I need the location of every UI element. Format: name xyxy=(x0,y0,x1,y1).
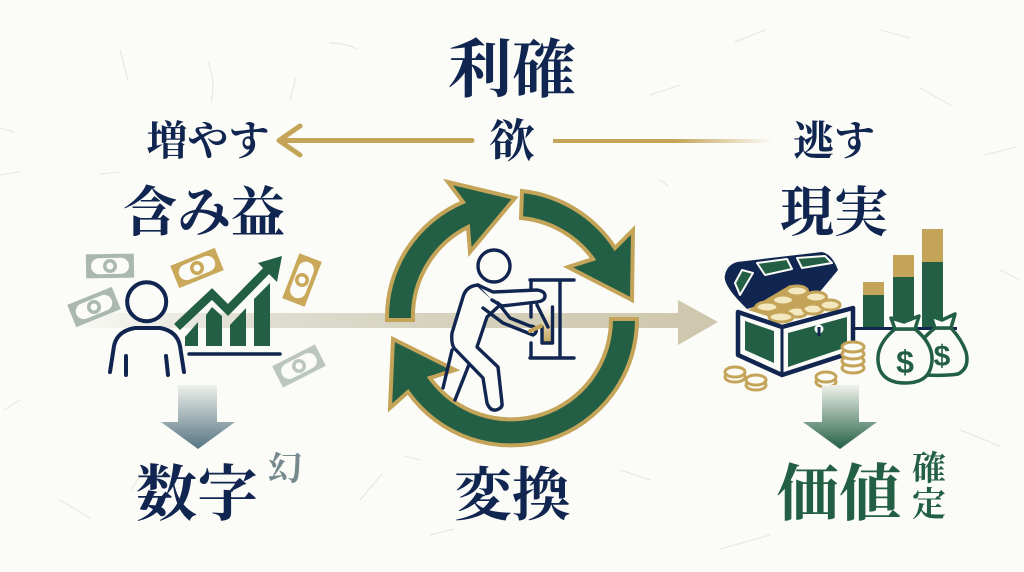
label: 確定: 定 xyxy=(912,486,946,524)
icon: circular arrows xyxy=(387,182,637,445)
lid highlights xyxy=(735,256,832,295)
arrow: horizontal flow band xyxy=(60,300,718,345)
keyhole xyxy=(814,324,824,334)
arrow: green down arrow xyxy=(803,385,877,449)
head xyxy=(478,250,510,282)
icon: person xyxy=(110,282,184,375)
heading: 変換: 変換 xyxy=(454,463,570,528)
coin stacks xyxy=(725,342,864,390)
heading: 数字: 数字 xyxy=(136,462,258,529)
label: 逃す: 逃す xyxy=(793,118,875,164)
rear leg xyxy=(443,350,470,400)
cycle arrow bottom xyxy=(390,319,637,445)
cycle arrow top left xyxy=(387,182,515,320)
icon: money bags xyxy=(878,314,967,383)
lower arm xyxy=(483,303,536,335)
banknote 1 xyxy=(86,254,134,278)
heading: 含み益: 含み益 xyxy=(123,183,285,243)
coins inside chest xyxy=(748,285,840,322)
banknote 5 xyxy=(272,344,326,388)
heading: 現実: 現実 xyxy=(780,183,888,243)
icon: person pulling lever xyxy=(443,250,574,410)
arrow: gold left arrow xyxy=(279,126,472,155)
title: 利確 xyxy=(448,35,576,106)
torso and front leg xyxy=(452,285,502,410)
label: 欲: 欲 xyxy=(489,116,535,167)
banknote 4 xyxy=(282,253,322,307)
arrow: gray down arrow xyxy=(161,385,235,449)
money bag front: $ xyxy=(896,344,914,380)
icon: floating banknotes xyxy=(67,248,326,388)
label: 増やす: 増やす xyxy=(146,118,270,164)
chest body xyxy=(738,308,853,375)
upper arm xyxy=(478,285,545,306)
label: 確定 xyxy=(912,450,946,524)
money bag back: $ xyxy=(934,340,951,373)
bar chart: growth bars xyxy=(853,229,957,328)
cycle arrow top right xyxy=(521,191,633,300)
chart: rising bars with arrow xyxy=(177,256,282,354)
heading: 価値: 価値 xyxy=(777,461,901,529)
gold handle xyxy=(530,326,541,331)
label: 確定: 確 xyxy=(912,450,946,488)
icon: treasure chest xyxy=(725,252,864,390)
banknote 2 xyxy=(67,287,121,327)
chest lid xyxy=(725,252,838,309)
door xyxy=(530,280,574,358)
banknote 3 xyxy=(170,248,224,288)
label: 幻: 幻 xyxy=(268,451,302,488)
line: gold fading line xyxy=(553,139,773,143)
